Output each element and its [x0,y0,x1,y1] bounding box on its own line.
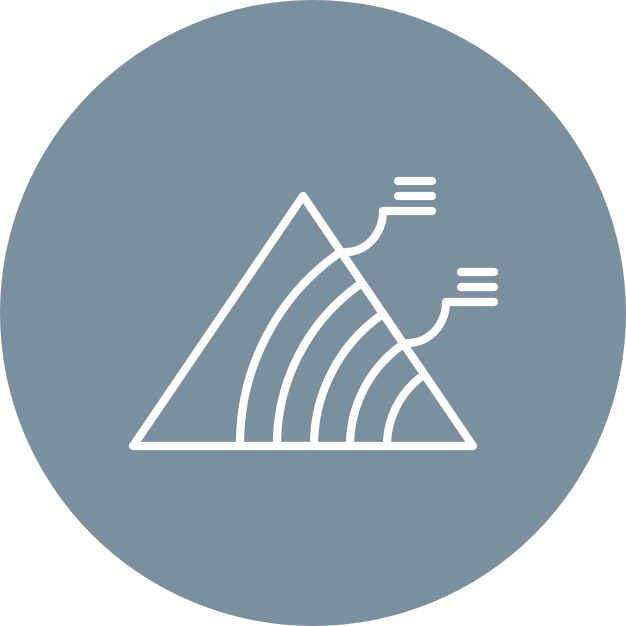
mountain illustration [133,181,494,446]
lower callout [408,272,494,343]
triangle outline [133,196,473,446]
rock strata arcs [240,253,421,446]
upper callout [346,181,432,252]
